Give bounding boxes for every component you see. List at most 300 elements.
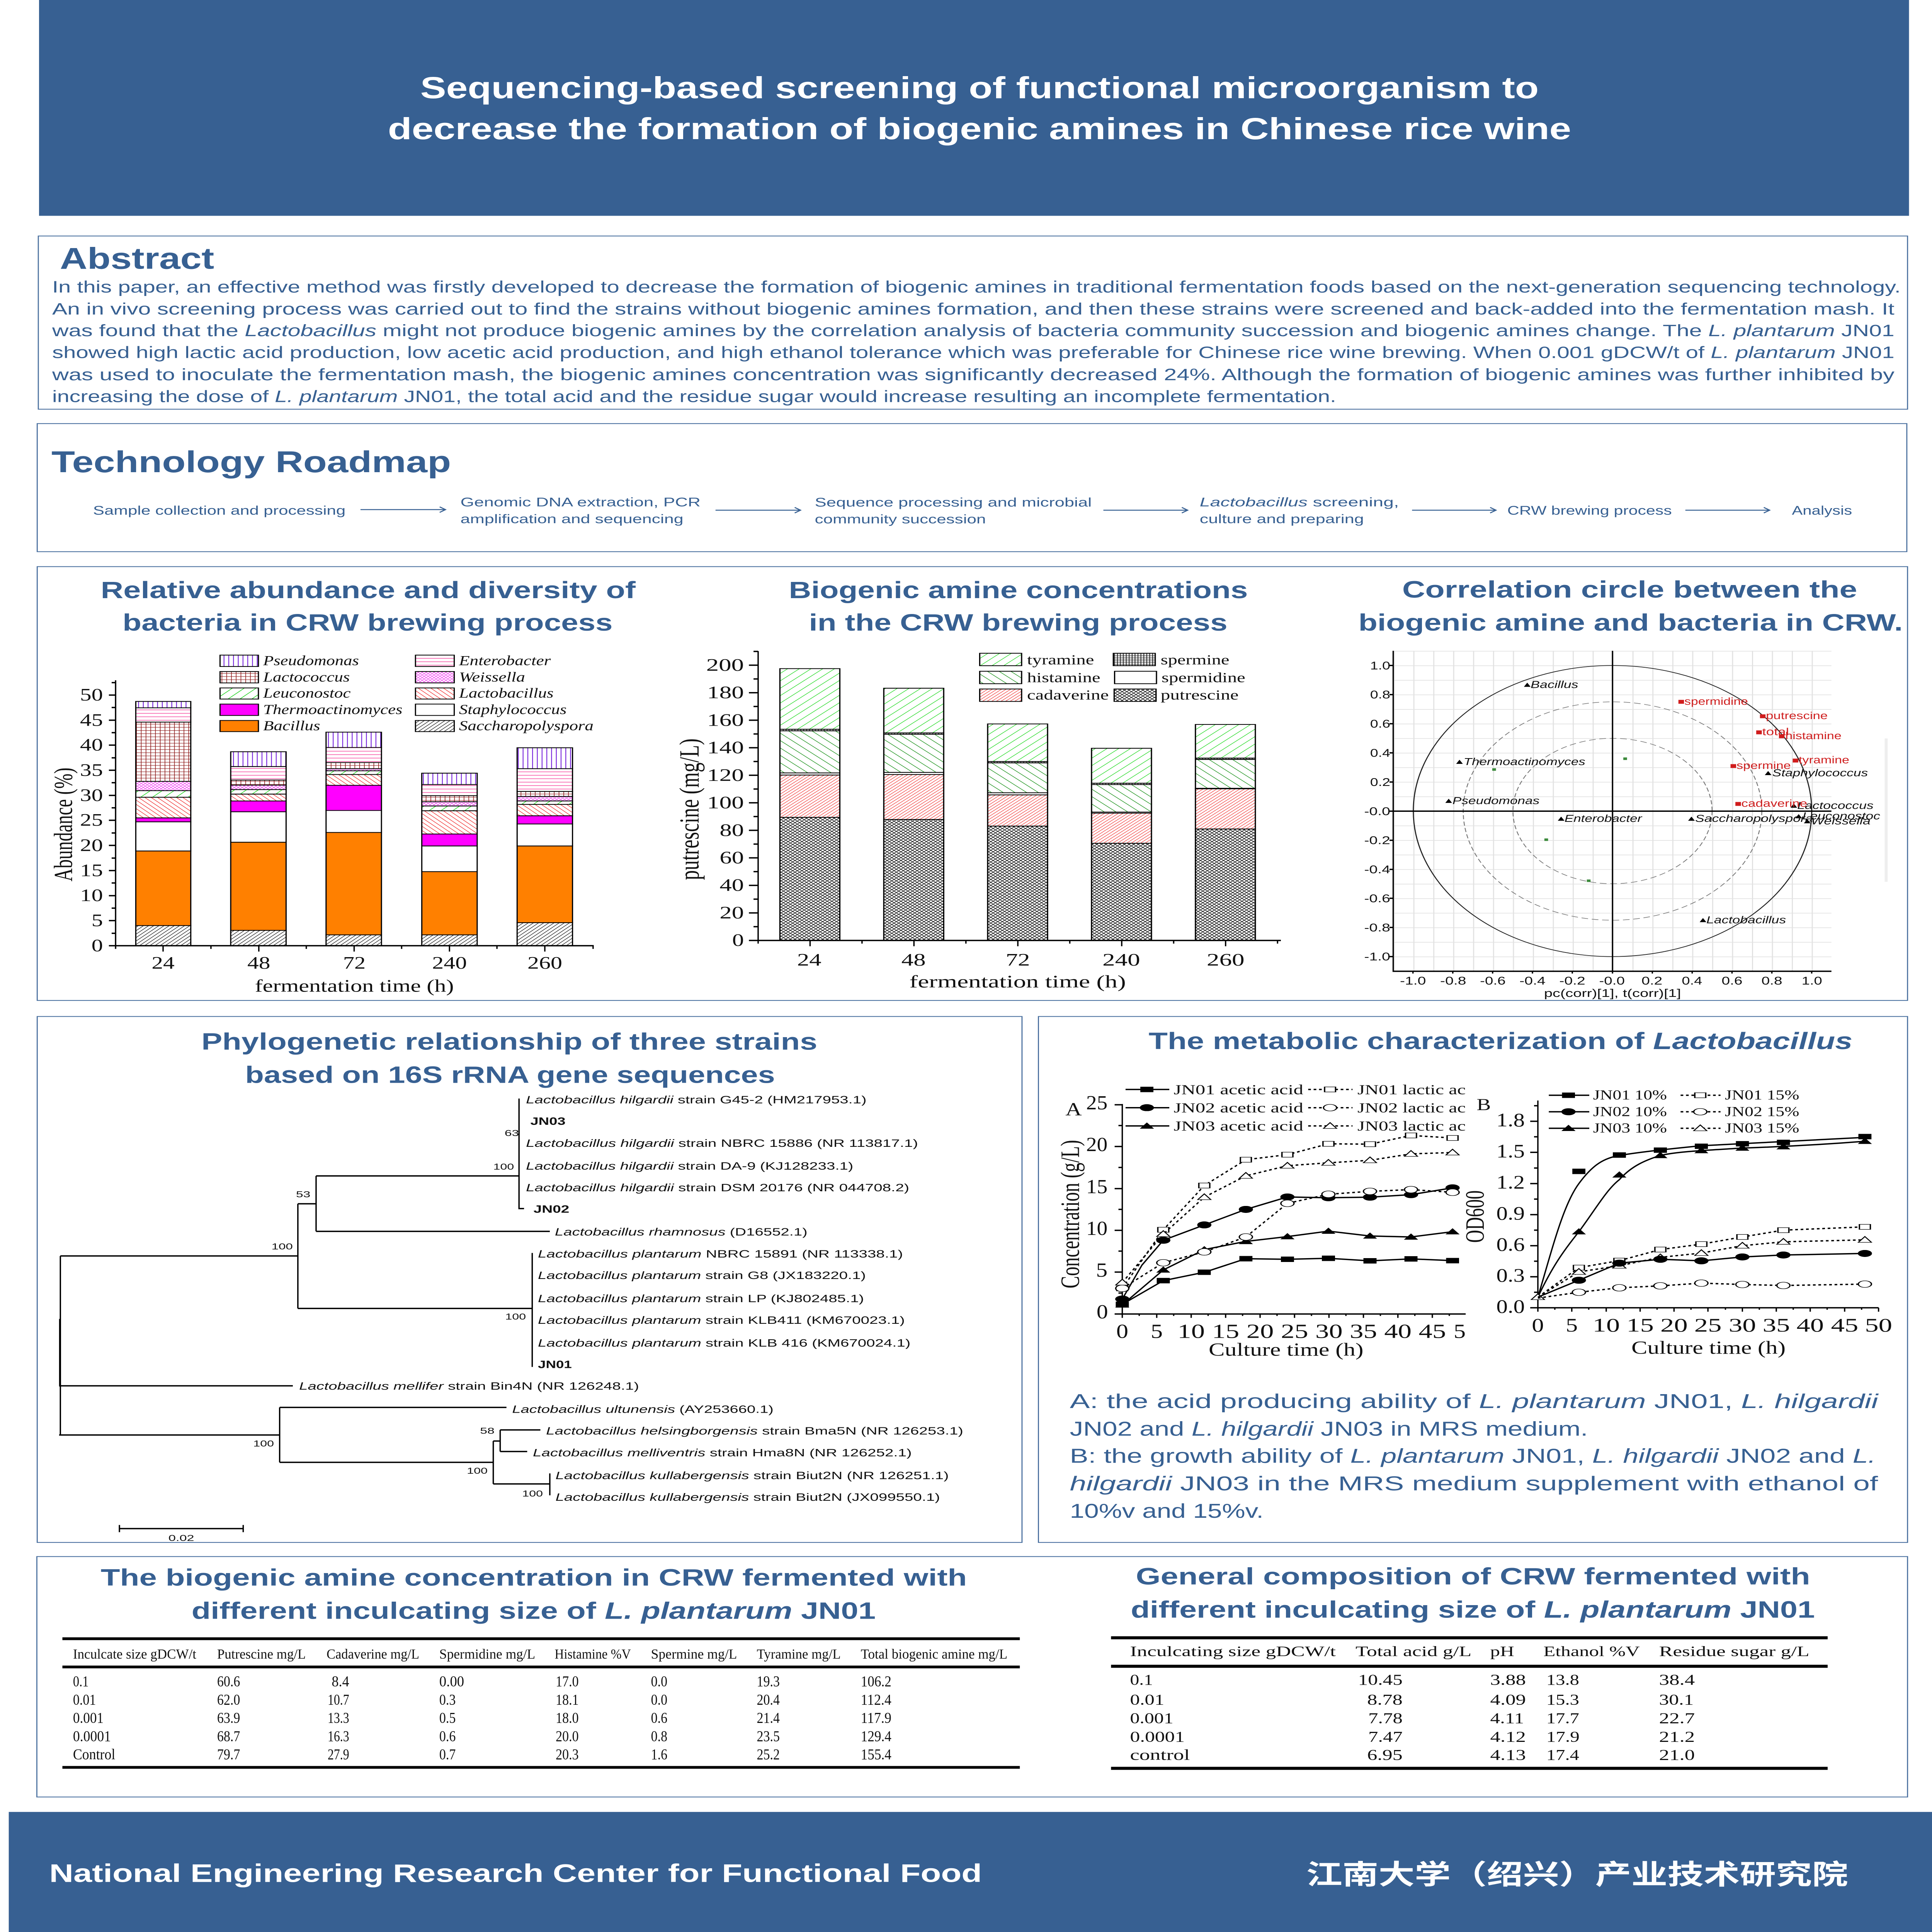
line charts A and B: 5 bbox=[1454, 1320, 1466, 1342]
panel: phylogenetic tree bbox=[37, 1017, 1022, 1543]
table header: Putrescine mg/L bbox=[217, 1647, 306, 1662]
chart A axis labels: 30 bbox=[1315, 1320, 1343, 1342]
heading: biogenic amine table bbox=[101, 1565, 967, 1624]
scale bar: 0.02 bbox=[168, 1533, 194, 1543]
table header bbox=[1130, 1644, 1810, 1660]
table rows: 62.0 bbox=[217, 1691, 240, 1708]
table rows: 60.6 bbox=[217, 1673, 240, 1690]
table rows: 106.2 bbox=[861, 1673, 891, 1690]
table header: Residue sugar g/L bbox=[1659, 1644, 1810, 1660]
table rows: 6.95 bbox=[1367, 1747, 1403, 1763]
heading: technology roadmap: Technology Roadmap bbox=[51, 445, 451, 479]
panel: technology roadmap bbox=[37, 423, 1907, 552]
species labels: Lactobacillus mellifer strain Bin4N (NR 126248.1) bbox=[299, 1380, 639, 1392]
footer banner bbox=[9, 1812, 1932, 1932]
y axis labels: 260 bbox=[527, 954, 562, 973]
chart A axis labels: 0 bbox=[1116, 1320, 1128, 1342]
title: decrease the formation of biogenic amines in Chinese rice wine bbox=[388, 112, 1571, 146]
chart A axis labels bbox=[1086, 1092, 1466, 1342]
table rows: 79.7 bbox=[217, 1746, 240, 1763]
table rows: 1.6 bbox=[651, 1746, 667, 1763]
heading: metabolic characterization: The metabolic characterization of Lactobacillus bbox=[1149, 1028, 1852, 1054]
species labels: Lactobacillus plantarum strain G8 (JX183220.1) bbox=[538, 1269, 866, 1281]
chart B: growth bbox=[1461, 1087, 1892, 1358]
legend bbox=[220, 653, 594, 733]
y axis labels: 30 bbox=[80, 786, 103, 805]
heading: general composition table: different inculcating size of L. plantarum JN01 bbox=[1131, 1597, 1815, 1623]
line charts A and B: JN01 lactic ac bbox=[1357, 1082, 1466, 1097]
step: sequence processing: Sequence processing and microbial bbox=[815, 495, 1092, 509]
table: general composition bbox=[1111, 1636, 1828, 1770]
step: Lactobacillus screening: culture and preparing bbox=[1200, 512, 1364, 526]
table rows: 22.7 bbox=[1659, 1710, 1695, 1726]
legend: Enterobacter bbox=[459, 653, 551, 668]
table rows: 18.0 bbox=[556, 1710, 579, 1726]
axis labels: 60 bbox=[719, 848, 744, 867]
species labels: Lactobacillus hilgardii strain NBRC 15886 (NR 113817.1) bbox=[526, 1137, 918, 1149]
bootstrap values: 53 bbox=[296, 1189, 310, 1199]
table rows: 10.45 bbox=[1358, 1672, 1403, 1688]
species labels: Lactobacillus melliventris strain Hma8N (NR 126252.1) bbox=[533, 1446, 912, 1459]
legend: Weissella bbox=[459, 669, 525, 685]
axis labels: 180 bbox=[707, 683, 744, 702]
footer: institute name: 江南大学（绍兴）产业技术研究院 bbox=[1306, 1859, 1848, 1890]
amine points: total bbox=[1762, 726, 1789, 738]
chart B axis labels bbox=[1496, 1109, 1892, 1336]
chart B: growth: JN03 15% bbox=[1725, 1120, 1799, 1136]
chart B legend: JN02 10% bbox=[1593, 1104, 1667, 1119]
chart B legend bbox=[1549, 1087, 1799, 1136]
table header: Ethanol %V bbox=[1543, 1644, 1640, 1660]
axis labels: -0.4 bbox=[1519, 975, 1546, 987]
footer: organisation name: National Engineering Research Center for Functional Food bbox=[49, 1859, 982, 1888]
bootstrap values bbox=[253, 1128, 543, 1498]
chart A axis labels: 15 bbox=[1086, 1175, 1107, 1198]
axis labels: 1.0 bbox=[1802, 975, 1822, 987]
axis labels: 120 bbox=[707, 765, 744, 785]
chart caption text: hilgardii JN03 in the MRS medium supplement with ethanol of bbox=[1070, 1472, 1878, 1495]
species labels: Lactobacillus plantarum strain KLB 416 (KM670024.1) bbox=[538, 1337, 910, 1349]
axis labels bbox=[674, 655, 1245, 992]
table rows: 25.2 bbox=[757, 1746, 780, 1763]
axis labels: -0.4 bbox=[1364, 864, 1390, 876]
table header bbox=[73, 1647, 1007, 1662]
y axis labels: 35 bbox=[80, 760, 103, 780]
heading: correlation circle: Correlation circle between the bbox=[1402, 577, 1857, 603]
legend: Saccharopolyspora bbox=[459, 718, 594, 733]
chart caption text: 10%v and 15%v. bbox=[1070, 1500, 1264, 1522]
axis labels: pc(corr)[1], t(corr)[1] bbox=[1544, 987, 1681, 1000]
step: analysis: Analysis bbox=[1792, 503, 1852, 517]
sample points bbox=[1492, 757, 1627, 882]
table rows: 0.0001 bbox=[1130, 1728, 1185, 1745]
table header: Inculcate size gDCW/t bbox=[73, 1647, 196, 1662]
chart B axis labels: 0 bbox=[1532, 1314, 1544, 1336]
legend: Lactococcus bbox=[263, 669, 350, 685]
bacteria points: Pseudomonas bbox=[1452, 795, 1539, 806]
table rows: 0.01 bbox=[1130, 1691, 1164, 1708]
bacteria points: Weissella bbox=[1811, 816, 1871, 827]
amine points: tyramine bbox=[1799, 755, 1849, 766]
bacteria points: Saccharopolyspora bbox=[1695, 813, 1813, 824]
panel: charts row bbox=[37, 566, 1908, 1000]
bacteria points: Enterobacter bbox=[1565, 813, 1643, 824]
table rows: 7.47 bbox=[1368, 1728, 1403, 1745]
legend: Lactobacillus bbox=[459, 685, 554, 701]
arrow 3 bbox=[1104, 507, 1188, 513]
axis labels: -0.0 bbox=[1364, 805, 1390, 818]
legend: spermidine bbox=[1162, 670, 1245, 685]
y axis labels: 50 bbox=[80, 685, 103, 704]
abstract body text: was found that the Lactobacillus might not produce biogenic amines by the correlation analysis of bacteria community succession and biogenic amines change. The L. plantarum JN01 bbox=[52, 321, 1895, 340]
chart B axis labels: 15 bbox=[1626, 1314, 1654, 1336]
bacteria points: Leuconostoc bbox=[1803, 811, 1880, 822]
bootstrap values: 100 bbox=[522, 1489, 543, 1498]
heading: biogenic amine table: The biogenic amine concentration in CRW fermented with bbox=[101, 1565, 967, 1591]
table rows: 21.2 bbox=[1659, 1728, 1695, 1745]
table rows bbox=[73, 1673, 891, 1763]
heading: correlation circle bbox=[1359, 577, 1903, 636]
abstract body text: was used to inoculate the fermentation mash, the biogenic amines concentration was significantly decreased 24%. Although the formation of biogenic amines was further inhibited by bbox=[52, 366, 1895, 384]
chart A axis labels: 5 bbox=[1151, 1320, 1163, 1342]
legend: Leuconostoc bbox=[263, 685, 350, 701]
table rows: 0.00 bbox=[439, 1673, 464, 1690]
chart caption text: B: the growth ability of L. plantarum JN01, L. hilgardii JN02 and L. bbox=[1070, 1445, 1876, 1467]
title: Sequencing-based screening of functional microorganism to bbox=[420, 71, 1539, 105]
table rows: 0.1 bbox=[73, 1673, 88, 1690]
chart A axis labels: 10 bbox=[1086, 1217, 1107, 1240]
heading: relative abundance: Relative abundance and diversity of bbox=[101, 577, 636, 604]
step: Lactobacillus screening bbox=[1200, 495, 1399, 526]
bacteria points: Thermoactinomyces bbox=[1464, 756, 1585, 767]
heading: phylogenetic relationship: based on 16S rRNA gene sequences bbox=[245, 1062, 775, 1088]
y axis labels: 40 bbox=[80, 735, 103, 755]
table rows: 17.9 bbox=[1546, 1728, 1580, 1745]
table rows: 18.1 bbox=[556, 1691, 579, 1708]
table rows: 20.0 bbox=[556, 1728, 579, 1744]
step: DNA extraction: amplification and sequencing bbox=[461, 512, 684, 526]
axis labels: -0.0 bbox=[1599, 975, 1625, 987]
bootstrap values: 63 bbox=[505, 1128, 519, 1138]
correlation circle chart bbox=[1364, 651, 1888, 1000]
table rows: 0.5 bbox=[439, 1710, 456, 1726]
table rows: 0.0001 bbox=[73, 1728, 111, 1744]
axis labels: 160 bbox=[707, 710, 744, 730]
table header: pH bbox=[1490, 1644, 1514, 1660]
chart A axis labels: 25 bbox=[1086, 1092, 1107, 1114]
step: sequence processing bbox=[815, 495, 1092, 526]
table rows: 4.12 bbox=[1490, 1728, 1526, 1745]
species labels: Lactobacillus hilgardii strain G45-2 (HM217953.1) bbox=[526, 1094, 866, 1105]
axis labels bbox=[1364, 660, 1822, 1000]
table header: Histamine %V bbox=[554, 1647, 631, 1662]
amine points: spermine bbox=[1736, 760, 1791, 771]
chart B axis labels: 1.2 bbox=[1496, 1171, 1525, 1193]
table rows: 0.0 bbox=[651, 1691, 667, 1708]
species labels: JN02 bbox=[534, 1203, 569, 1215]
heading: relative abundance: bacteria in CRW brewing process bbox=[122, 609, 612, 636]
chart A axis labels: 0 bbox=[1097, 1301, 1108, 1323]
chart B axis labels: 1.8 bbox=[1496, 1109, 1525, 1131]
table rows: 13.8 bbox=[1546, 1672, 1579, 1688]
tree branches bbox=[59, 1099, 550, 1495]
table rows: 0.01 bbox=[73, 1691, 96, 1708]
bars bbox=[136, 701, 573, 946]
table rows: 112.4 bbox=[861, 1691, 891, 1708]
table rows: 117.9 bbox=[861, 1710, 891, 1726]
y axis labels: 20 bbox=[80, 836, 103, 855]
y axis labels: 24 bbox=[151, 954, 175, 973]
y axis labels: 10 bbox=[80, 886, 103, 905]
chart A: acid production: Concentration (g/L) bbox=[1056, 1140, 1085, 1288]
amine points: putrescine bbox=[1766, 710, 1828, 721]
step: sequence processing: community succession bbox=[815, 512, 986, 526]
table rows: 0.6 bbox=[651, 1710, 667, 1726]
bootstrap values: 58 bbox=[480, 1426, 495, 1436]
table rows: 23.5 bbox=[757, 1728, 780, 1744]
species labels: Lactobacillus plantarum NBRC 15891 (NR 113338.1) bbox=[538, 1248, 903, 1260]
line charts A and B bbox=[1056, 1082, 1892, 1360]
table rows: 4.13 bbox=[1490, 1747, 1526, 1763]
table rows: 0.6 bbox=[439, 1728, 456, 1744]
chart A axis labels: 15 bbox=[1212, 1320, 1239, 1342]
table header: Inculcating size gDCW/t bbox=[1130, 1644, 1336, 1660]
abstract body text: showed high lactic acid production, low acetic acid production, and high ethanol tolerance which was preferable for Chinese rice wine brewing. When 0.001 gDCW/t of L. plantarum JN01 bbox=[52, 344, 1895, 362]
heading: abstract: Abstract bbox=[60, 242, 214, 275]
table header: Spermine mg/L bbox=[651, 1647, 737, 1662]
legend: spermine bbox=[1161, 652, 1230, 668]
table rows: 0.001 bbox=[73, 1710, 104, 1726]
line charts A and B: JN03 lactic ac bbox=[1357, 1118, 1466, 1134]
heading: correlation circle: biogenic amine and bacteria in CRW. bbox=[1359, 609, 1903, 636]
table header: Spermidine mg/L bbox=[439, 1647, 535, 1662]
chart B legend: JN01 10% bbox=[1593, 1087, 1667, 1103]
chart A axis labels: 25 bbox=[1281, 1320, 1308, 1342]
axis labels: -0.6 bbox=[1480, 975, 1506, 987]
abstract body text: In this paper, an effective method was firstly developed to decrease the formation of biogenic amines in traditional fermentation foods based on the next-generation sequencing technology. bbox=[52, 278, 1901, 296]
chart A legend: JN02 acetic acid bbox=[1173, 1100, 1303, 1116]
chart B axis labels: 50 bbox=[1865, 1314, 1892, 1336]
table header: Total biogenic amine mg/L bbox=[861, 1647, 1007, 1662]
species labels: Lactobacillus hilgardii strain DA-9 (KJ128233.1) bbox=[526, 1160, 853, 1172]
amine points: histamine bbox=[1785, 730, 1842, 742]
panel: abstract bbox=[38, 236, 1908, 409]
chart A: acid production: Culture time (h) bbox=[1209, 1340, 1364, 1360]
species labels: Lactobacillus hilgardii strain DSM 20176 (NR 044708.2) bbox=[526, 1181, 909, 1194]
heading: phylogenetic relationship bbox=[201, 1029, 817, 1088]
chart B axis labels: 5 bbox=[1566, 1314, 1578, 1336]
y axis labels: 240 bbox=[432, 954, 467, 973]
axes bbox=[749, 651, 1281, 946]
chart B axis labels: 0.0 bbox=[1496, 1296, 1525, 1317]
chart B axis labels: 25 bbox=[1694, 1314, 1722, 1336]
species labels: Lactobacillus plantarum strain LP (KJ802485.1) bbox=[538, 1292, 864, 1304]
axis labels: 200 bbox=[706, 655, 744, 675]
y axis labels: 15 bbox=[80, 861, 103, 880]
chart B: growth: JN02 15% bbox=[1725, 1104, 1799, 1119]
heading: general composition table bbox=[1131, 1563, 1815, 1623]
table rows: 38.4 bbox=[1659, 1672, 1695, 1688]
axis labels: 0.6 bbox=[1721, 975, 1742, 987]
table header: Total acid g/L bbox=[1355, 1644, 1471, 1660]
chart B legend: JN03 10% bbox=[1593, 1120, 1667, 1136]
chart A axis labels: 40 bbox=[1384, 1320, 1412, 1342]
table header: Cadaverine mg/L bbox=[327, 1647, 419, 1662]
species labels: Lactobacillus kullabergensis strain Biut2N (JX099550.1) bbox=[556, 1491, 940, 1503]
heading: relative abundance bbox=[101, 577, 636, 636]
axis labels: 100 bbox=[707, 793, 744, 812]
table rows: Control bbox=[73, 1746, 115, 1763]
chart A legend bbox=[1126, 1082, 1466, 1134]
axis labels: 0.4 bbox=[1370, 747, 1390, 759]
y axis labels: fermentation time (h) bbox=[255, 976, 454, 996]
axis labels: -0.6 bbox=[1364, 893, 1390, 905]
heading: biogenic amine concentrations: Biogenic amine concentrations bbox=[789, 577, 1248, 604]
axes bbox=[109, 680, 593, 952]
axis labels: 0.2 bbox=[1641, 975, 1662, 987]
table rows: 0.001 bbox=[1130, 1710, 1173, 1726]
chart caption text: A: the acid producing ability of L. plantarum JN01, L. hilgardii bbox=[1070, 1390, 1879, 1412]
heading: phylogenetic relationship: Phylogenetic relationship of three strains bbox=[201, 1029, 817, 1055]
chart B axis labels: 0.3 bbox=[1496, 1264, 1525, 1286]
step: sample collection: Sample collection and processing bbox=[93, 503, 345, 517]
axis labels: -1.0 bbox=[1364, 951, 1390, 963]
table rows: 0.8 bbox=[651, 1728, 667, 1744]
title bbox=[388, 71, 1571, 146]
table rows: 20.4 bbox=[757, 1691, 780, 1708]
species labels: Lactobacillus plantarum strain KLB411 (KM670023.1) bbox=[538, 1314, 905, 1326]
chart B axis labels: 0.9 bbox=[1496, 1202, 1525, 1224]
legend: putrescine bbox=[1161, 688, 1238, 703]
bootstrap values: 100 bbox=[505, 1312, 526, 1321]
arrow 1 bbox=[361, 507, 446, 512]
chart A legend: JN01 acetic acid bbox=[1173, 1082, 1303, 1097]
chart A: acid production bbox=[1056, 1082, 1466, 1360]
step: CRW brewing: CRW brewing process bbox=[1507, 503, 1672, 517]
table rows: 0.1 bbox=[1130, 1672, 1153, 1688]
table rows: 3.88 bbox=[1490, 1672, 1526, 1688]
legend: cadaverine bbox=[1027, 688, 1109, 703]
axis labels: fermentation time (h) bbox=[909, 972, 1126, 992]
legend: Bacillus bbox=[263, 718, 320, 733]
axis labels: 140 bbox=[707, 738, 744, 757]
bootstrap values: 100 bbox=[467, 1466, 488, 1476]
chart A: acid production: A bbox=[1065, 1099, 1082, 1119]
legend: histamine bbox=[1027, 670, 1100, 685]
scale bar bbox=[119, 1525, 243, 1543]
chart A axis labels: 20 bbox=[1086, 1133, 1107, 1156]
arrow 5 bbox=[1685, 507, 1770, 513]
chart B: growth: B bbox=[1477, 1095, 1491, 1114]
axis labels: -0.8 bbox=[1440, 975, 1466, 987]
species labels: Lactobacillus rhamnosus (D16552.1) bbox=[555, 1226, 808, 1238]
chart B axis labels: 30 bbox=[1729, 1314, 1756, 1336]
y axis labels: 48 bbox=[247, 954, 270, 973]
legend: Pseudomonas bbox=[263, 653, 359, 668]
axis labels: 20 bbox=[719, 903, 744, 922]
phylogenetic tree diagram bbox=[59, 1094, 963, 1543]
table: biogenic amine concentration bbox=[62, 1637, 1020, 1769]
y axis labels: 0 bbox=[92, 936, 103, 955]
axis labels: -1.0 bbox=[1400, 975, 1426, 987]
chart A axis labels: 20 bbox=[1247, 1320, 1274, 1342]
species labels: Lactobacillus kullabergensis strain Biut2N (NR 126251.1) bbox=[556, 1469, 949, 1481]
bootstrap values: 100 bbox=[493, 1162, 514, 1172]
axis labels: -0.2 bbox=[1364, 834, 1390, 847]
chart A axis labels: 10 bbox=[1177, 1320, 1205, 1342]
bootstrap values: 100 bbox=[272, 1242, 293, 1251]
axis labels: 72 bbox=[1006, 950, 1030, 969]
chart A legend: JN03 acetic acid bbox=[1173, 1118, 1303, 1134]
species labels: Lactobacillus helsingborgensis strain Bma5N (NR 126253.1) bbox=[546, 1425, 963, 1437]
chart B axis labels: 35 bbox=[1763, 1314, 1790, 1336]
axis labels: 240 bbox=[1102, 950, 1140, 969]
abstract body text bbox=[52, 278, 1901, 406]
table rows bbox=[1130, 1672, 1695, 1763]
arrow 2 bbox=[716, 507, 801, 513]
axis labels: 24 bbox=[797, 950, 821, 969]
table rows: 8.78 bbox=[1367, 1691, 1403, 1708]
axis labels: 1.0 bbox=[1370, 660, 1390, 672]
panel: metabolic characterization bbox=[1038, 1017, 1908, 1543]
table rows: 4.09 bbox=[1490, 1691, 1526, 1708]
axis labels: 260 bbox=[1207, 950, 1245, 969]
axis labels: putrescine (mg/L) bbox=[674, 738, 705, 880]
chart A axis labels: 35 bbox=[1350, 1320, 1377, 1342]
table rows: 17.4 bbox=[1546, 1747, 1579, 1763]
legend: Thermoactinomyces bbox=[263, 702, 402, 717]
chart B axis labels: 45 bbox=[1831, 1314, 1858, 1336]
bacteria points: Staphylococcus bbox=[1772, 767, 1868, 779]
axis labels: 40 bbox=[719, 876, 744, 895]
table rows: 7.78 bbox=[1368, 1710, 1403, 1726]
circles bbox=[1413, 665, 1812, 957]
species labels: JN03 bbox=[531, 1115, 566, 1127]
table rows: 27.9 bbox=[328, 1746, 349, 1763]
axis labels: 0.8 bbox=[1762, 975, 1782, 987]
step: DNA extraction bbox=[461, 495, 701, 526]
chart caption text bbox=[1070, 1390, 1879, 1522]
y axis labels: 5 bbox=[92, 911, 103, 930]
line charts A and B: JN02 lactic ac bbox=[1357, 1100, 1466, 1116]
stacked bar chart: bacteria abundance bbox=[49, 653, 594, 996]
y axis labels bbox=[49, 685, 562, 996]
table rows: 0.7 bbox=[439, 1746, 456, 1763]
table rows: 21.0 bbox=[1659, 1747, 1695, 1763]
axis labels: 0.8 bbox=[1370, 689, 1390, 701]
table rows: 19.3 bbox=[757, 1673, 780, 1690]
bacteria points bbox=[1446, 679, 1880, 925]
table rows: 15.3 bbox=[1546, 1691, 1579, 1708]
header banner bbox=[39, 0, 1909, 216]
y axis labels: 72 bbox=[343, 954, 366, 973]
chart B axis labels: 40 bbox=[1796, 1314, 1824, 1336]
axis labels: 0.2 bbox=[1370, 776, 1390, 789]
axis labels: -0.2 bbox=[1559, 975, 1585, 987]
axis labels: 0.6 bbox=[1370, 718, 1390, 730]
chart B axis labels: 0.6 bbox=[1496, 1233, 1525, 1255]
amine points: spermidine bbox=[1684, 696, 1748, 707]
arrow 4 bbox=[1412, 507, 1496, 513]
table rows: 8.4 bbox=[332, 1673, 349, 1690]
legend: tyramine bbox=[1027, 652, 1094, 668]
chart B: growth: JN01 15% bbox=[1725, 1087, 1799, 1103]
table rows: 30.1 bbox=[1659, 1691, 1694, 1708]
y axis labels: Abundance (%) bbox=[49, 768, 78, 881]
chart B axis labels: 10 bbox=[1593, 1314, 1620, 1336]
table rows: 13.3 bbox=[328, 1710, 349, 1726]
table rows: 129.4 bbox=[861, 1728, 891, 1744]
